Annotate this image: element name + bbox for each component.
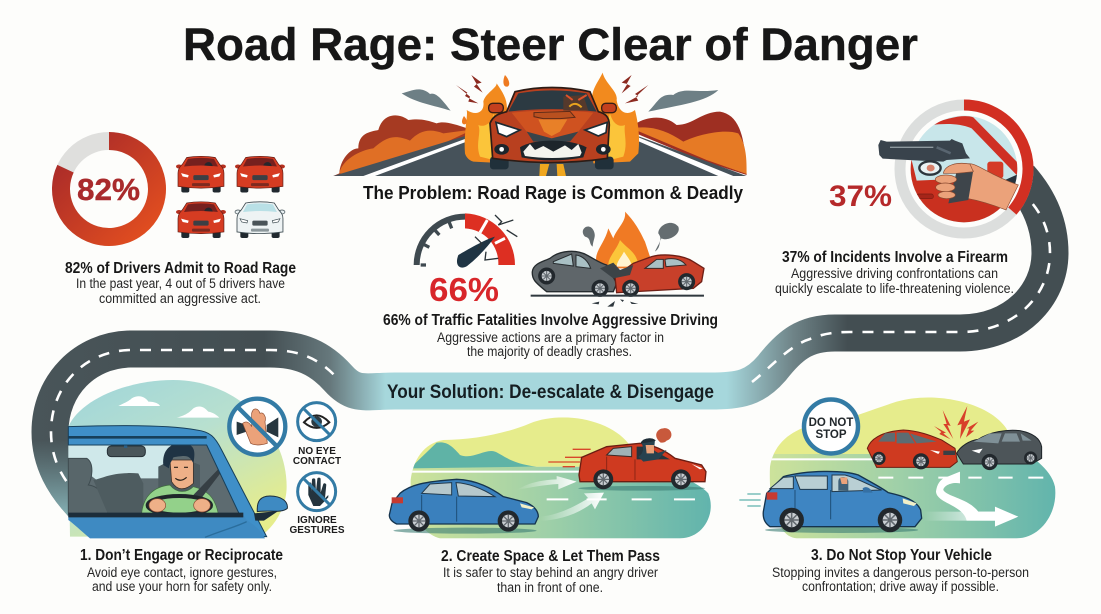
text block: 37 percent [775, 249, 1014, 296]
text block: 66 percent [383, 312, 718, 359]
icon: do not stop sign [804, 400, 858, 454]
text block: step 1: Avoid eye contact, ignore gestures, [87, 565, 277, 580]
label: ignore gestures: IGNORE [297, 515, 337, 526]
text block: 37 percent: quickly escalate to life-threatening violence. [775, 281, 1014, 296]
title: Road Rage: Steer Clear of Danger [183, 19, 918, 70]
text block: step 1: 1. Don’t Engage or Reciprocate [80, 547, 283, 564]
text block: step 3: Stopping invites a dangerous person-to-person [772, 565, 1029, 580]
text block: 82 percent [65, 260, 296, 306]
text block: step 2 [441, 548, 660, 595]
text block: step 3: 3. Do Not Stop Your Vehicle [811, 547, 992, 564]
icon: no eye contact [298, 403, 336, 441]
text block: step 2: than in front of one. [497, 580, 603, 595]
banner heading: Your Solution: De-escalate & Disengage [387, 382, 714, 403]
text block: step 1: and use your horn for safety only. [92, 579, 272, 594]
icon: angry flaming car on road [333, 73, 747, 176]
text block: step 2: 2. Create Space & Let Them Pass [441, 548, 660, 565]
label: no eye contact: CONTACT [293, 456, 341, 467]
icons: four cars, one in five not aggressive [176, 156, 285, 238]
icon: ignore gestures [298, 473, 336, 511]
stat: 37%: 37% [829, 180, 892, 213]
panel: 66 percent fatalities [383, 212, 718, 359]
panel: the problem hero [333, 73, 747, 203]
panel: step 1 don't engage [68, 380, 345, 594]
panel: step 2 create space [389, 407, 717, 595]
text block: 37 percent: Aggressive driving confrontations can [791, 266, 998, 281]
illustration: driver at wheel seen through windshield [68, 380, 287, 538]
illustration: blue car drives away from confrontation [739, 398, 1056, 538]
text block: step 1 [80, 547, 283, 594]
label: no eye contact: NO EYE [298, 446, 336, 457]
icon: gun in car window within 37% ring [878, 105, 1028, 233]
icon: do not stop sign: STOP [815, 429, 847, 441]
text block: step 3: confrontation; drive away if possible. [802, 579, 999, 594]
winding road and solution banner [50, 178, 1050, 512]
label: no eye contact [293, 446, 341, 467]
heading: the problem: The Problem: Road Rage is Common & Deadly [363, 182, 744, 203]
label: ignore gestures: GESTURES [289, 525, 345, 536]
text block: step 2: It is safer to stay behind an angry driver [443, 565, 658, 580]
text block: 37 percent: 37% of Incidents Involve a Firearm [782, 249, 1008, 266]
panel: 37 percent firearm [775, 105, 1028, 296]
icon: no horn [229, 399, 285, 455]
text block: 66 percent: the majority of deadly crashes. [467, 344, 632, 359]
stat: 66%: 66% [429, 271, 499, 308]
donut chart: 82%: 82% [77, 172, 140, 207]
illustration: blue car lets red car pass [388, 418, 711, 538]
text block: 82 percent: 82% of Drivers Admit to Road Rage [65, 260, 296, 277]
icon: do not stop sign: DO NOT [809, 417, 853, 429]
panel: step 3 do not stop [739, 390, 1063, 594]
label: ignore gestures [289, 515, 345, 536]
text block: 66 percent: Aggressive actions are a primary factor in [437, 330, 664, 345]
gauge: speedometer in the red [417, 213, 517, 268]
text block: 66 percent: 66% of Traffic Fatalities Involve Aggressive Driving [383, 312, 718, 329]
text block: 82 percent: In the past year, 4 out of 5 drivers have [76, 276, 285, 291]
text block: 82 percent: committed an aggressive act. [99, 291, 261, 306]
panel: 82 percent drivers [61, 141, 296, 306]
donut chart: 82% [61, 141, 157, 237]
text block: step 3 [772, 547, 1029, 594]
icon: two-car crash with flames [531, 212, 704, 307]
